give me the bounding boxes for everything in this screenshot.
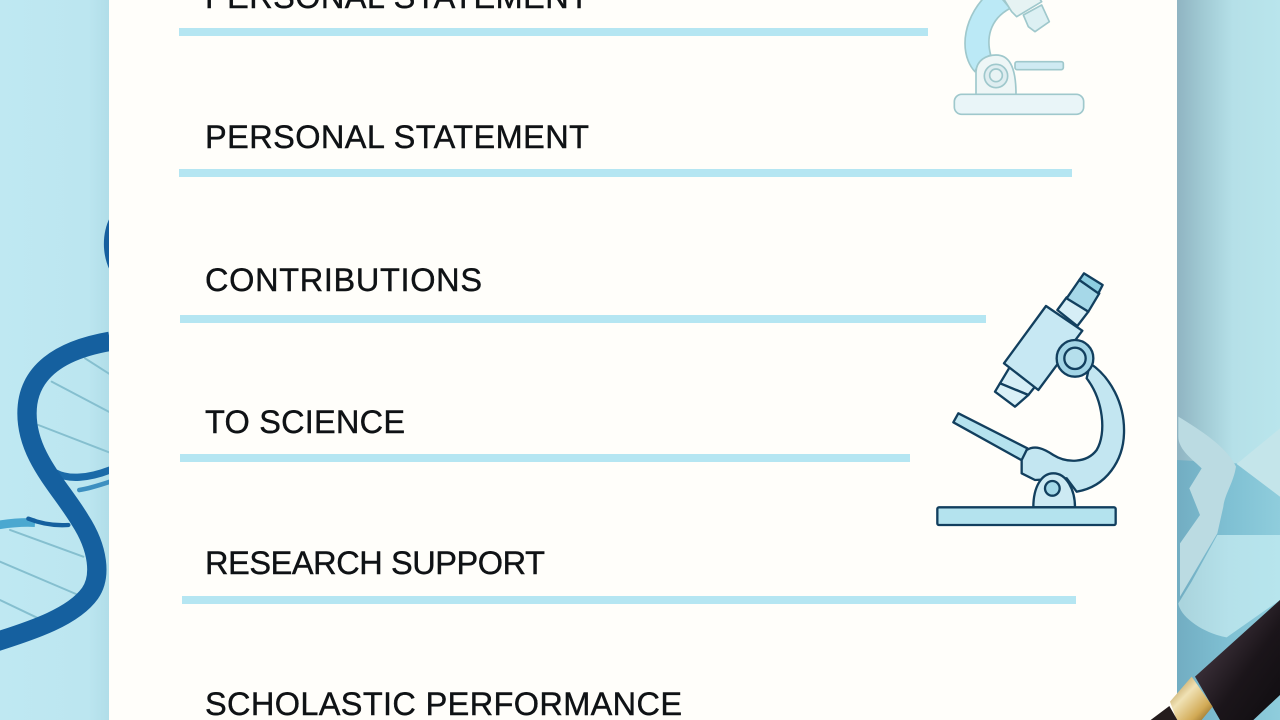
base plate bbox=[937, 507, 1116, 525]
section rule 4 bbox=[180, 454, 910, 462]
eyepiece bbox=[1057, 297, 1088, 326]
section rule 1 bbox=[179, 28, 928, 36]
section rule 2 bbox=[179, 169, 1072, 177]
illustration: faded ribbon and background shade bbox=[1177, 417, 1280, 720]
right background bbox=[1176, 0, 1280, 720]
illustration: DNA helix bbox=[0, 217, 110, 642]
left background bbox=[0, 0, 110, 720]
stage arm bbox=[953, 413, 1027, 461]
heading: to science: TO SCIENCE bbox=[205, 404, 405, 440]
objective collar bbox=[1000, 367, 1035, 395]
illustration: fountain pen bbox=[1151, 600, 1280, 720]
pillar bbox=[1033, 473, 1075, 507]
heading: personal statement: PERSONAL STATEMENT bbox=[205, 119, 589, 155]
section rule 3 bbox=[180, 315, 986, 323]
curved arm bbox=[1022, 363, 1124, 492]
heading: contributions: CONTRIBUTIONS bbox=[205, 262, 482, 298]
section rule 5 bbox=[182, 596, 1076, 604]
objective tip bbox=[995, 383, 1028, 407]
faded microscope illustration bbox=[954, 0, 1084, 114]
heading: research support: RESEARCH SUPPORT bbox=[205, 545, 545, 581]
microscope illustration bbox=[937, 273, 1124, 525]
focus knob bbox=[1057, 340, 1093, 377]
lens body bbox=[1004, 306, 1082, 390]
